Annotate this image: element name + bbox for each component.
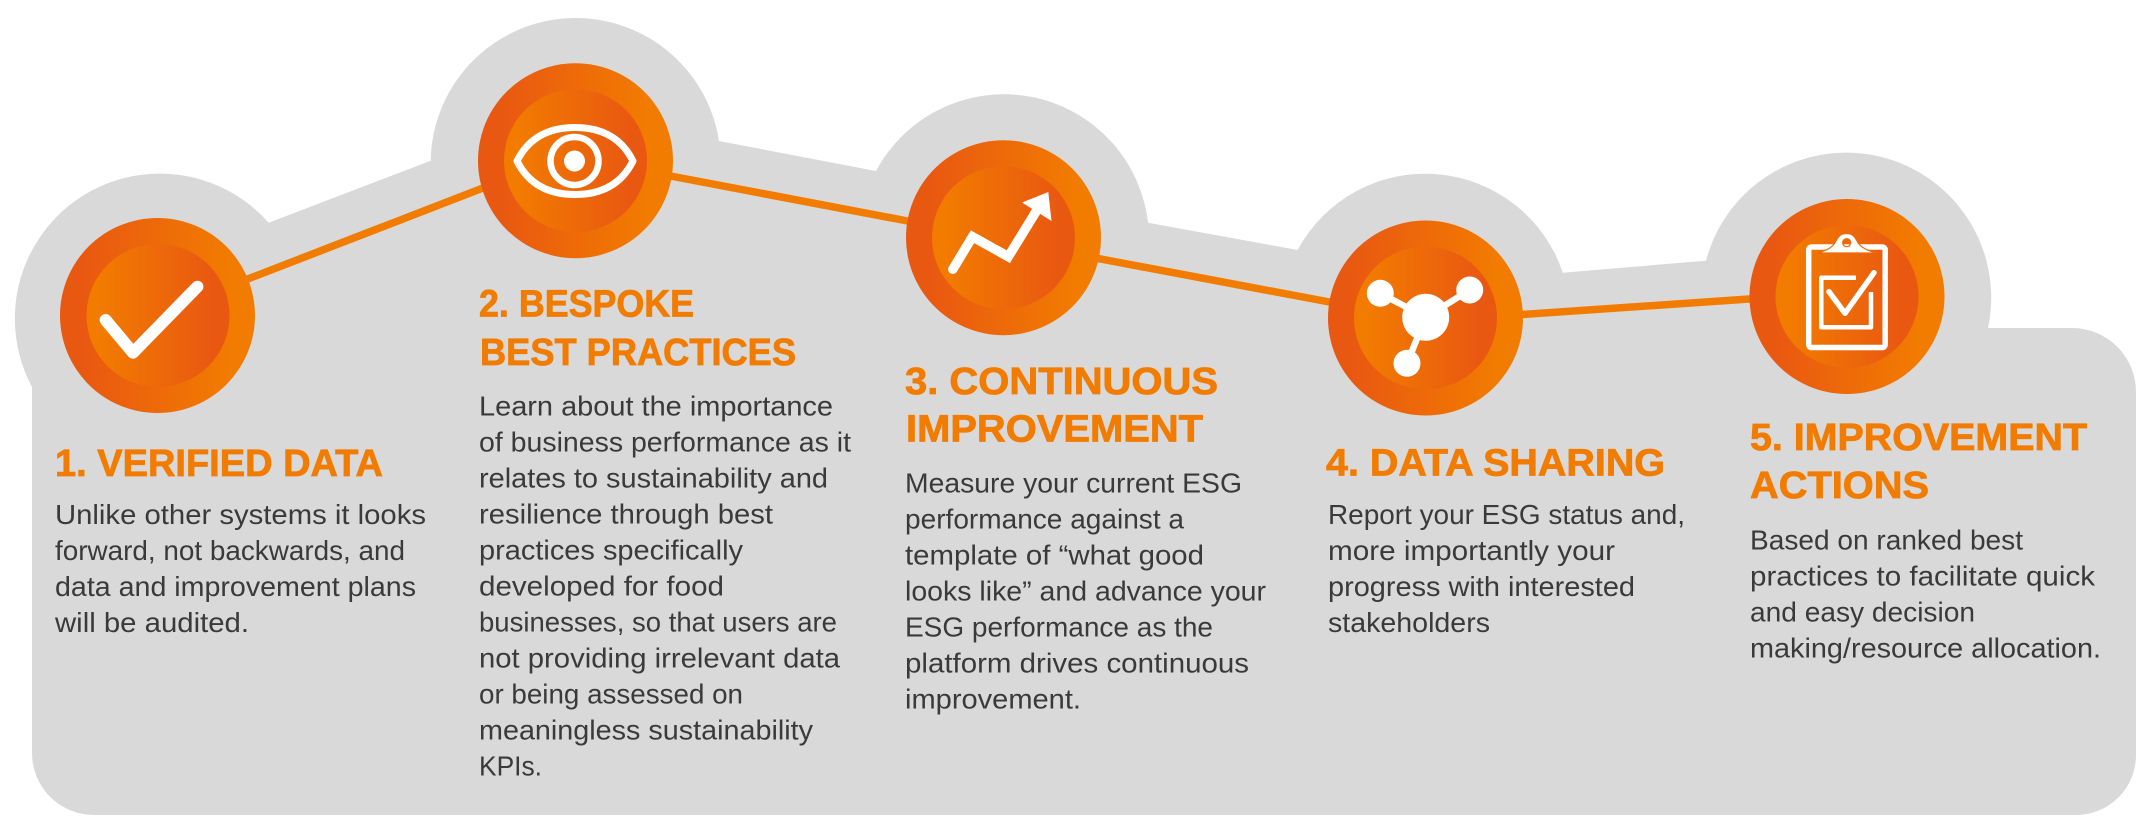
- text block: step 2 description: of business performance as it: [479, 427, 851, 458]
- text block: step 5 description: making/resource allocation.: [1750, 632, 2101, 663]
- heading: 3. Continuous Improvement: IMPROVEMENT: [906, 409, 1203, 451]
- heading: 5. Improvement Actions: [1750, 417, 2087, 507]
- icon: network nodes badge: [1328, 220, 1523, 416]
- heading: 4. Data Sharing: 4. DATA SHARING: [1326, 443, 1665, 485]
- text block: step 4 description: Report your ESG status and,: [1328, 499, 1685, 530]
- icon: eye badge: [478, 63, 673, 258]
- text block: step 3 description: Measure your current ESG: [905, 468, 1242, 499]
- text block: step 2 description: resilience through best: [479, 499, 773, 530]
- text block: step 1 description: data and improvement plans: [55, 571, 416, 602]
- arrow: connector from step 4 to step 5: [1515, 298, 1760, 315]
- heading: 1. Verified Data: 1. VERIFIED DATA: [55, 443, 383, 485]
- text block: step 3 description: template of “what good: [905, 540, 1204, 571]
- text block: step 4 description: stakeholders: [1328, 607, 1490, 638]
- text block: step 3 description: platform drives continuous: [905, 648, 1249, 679]
- heading: 5. Improvement Actions: 5. IMPROVEMENT: [1750, 417, 2087, 459]
- heading: 2. Bespoke Best Practices: 2. BESPOKE: [479, 284, 694, 326]
- text block: step 2 description: meaningless sustainability: [479, 714, 813, 746]
- heading: 3. Continuous Improvement: 3. CONTINUOUS: [905, 361, 1218, 403]
- text block: step 3 description: looks like” and advance your: [905, 576, 1266, 607]
- arrow: connector from step 1 to step 2: [240, 185, 490, 282]
- panel: step 5 improvement actions: [1750, 199, 2101, 663]
- text block: step 2 description: or being assessed on: [479, 678, 743, 710]
- text block: step 2 description: [479, 391, 851, 782]
- text block: step 5 description: and easy decision: [1750, 596, 1975, 627]
- text block: step 3 description: improvement.: [905, 684, 1081, 715]
- panel: step 2 bespoke best practices: [478, 63, 851, 781]
- heading: 2. Bespoke Best Practices: [479, 284, 796, 374]
- icon: check mark badge: [60, 218, 255, 413]
- text block: step 2 description: businesses, so that users are: [479, 606, 837, 638]
- arrow: connector from step 2 to step 3: [660, 174, 918, 223]
- icon: rising arrow badge: [906, 140, 1101, 335]
- panel: step 1 verified data: [54, 218, 426, 638]
- text block: step 2 description: developed for food: [479, 570, 724, 602]
- text block: step 4 description: progress with interested: [1328, 571, 1635, 602]
- text block: step 1 description: [54, 499, 426, 638]
- heading: 2. Bespoke Best Practices: BEST PRACTICES: [480, 332, 796, 374]
- panel: step 3 continuous improvement: [905, 140, 1266, 715]
- text block: step 2 description: Learn about the importance: [479, 391, 833, 422]
- text block: step 2 description: practices specifically: [479, 534, 743, 566]
- icon: clipboard badge: [1750, 199, 1944, 394]
- text block: step 3 description: performance against a: [905, 504, 1184, 535]
- text block: step 5 description: [1750, 524, 2101, 663]
- text block: step 5 description: Based on ranked best: [1750, 524, 2023, 555]
- text block: step 5 description: practices to facilitate quick: [1750, 560, 2096, 591]
- text block: step 1 description: forward, not backwards, and: [55, 535, 405, 566]
- text block: step 4 description: [1328, 499, 1685, 638]
- text block: step 2 description: KPIs.: [479, 750, 542, 782]
- heading: 3. Continuous Improvement: [905, 361, 1218, 451]
- arrow: connector from step 3 to step 4: [1090, 257, 1340, 304]
- text block: step 3 description: ESG performance as the: [905, 612, 1213, 643]
- text block: step 2 description: not providing irrelevant data: [479, 642, 840, 674]
- text block: step 1 description: Unlike other systems it looks: [55, 499, 426, 530]
- text block: step 2 description: relates to sustainability and: [479, 463, 828, 494]
- heading: 5. Improvement Actions: ACTIONS: [1750, 465, 1929, 507]
- text block: step 4 description: more importantly your: [1328, 535, 1615, 566]
- panel: step 4 data sharing: [1326, 220, 1685, 638]
- text block: step 1 description: will be audited.: [54, 607, 249, 638]
- text block: step 3 description: [905, 468, 1266, 715]
